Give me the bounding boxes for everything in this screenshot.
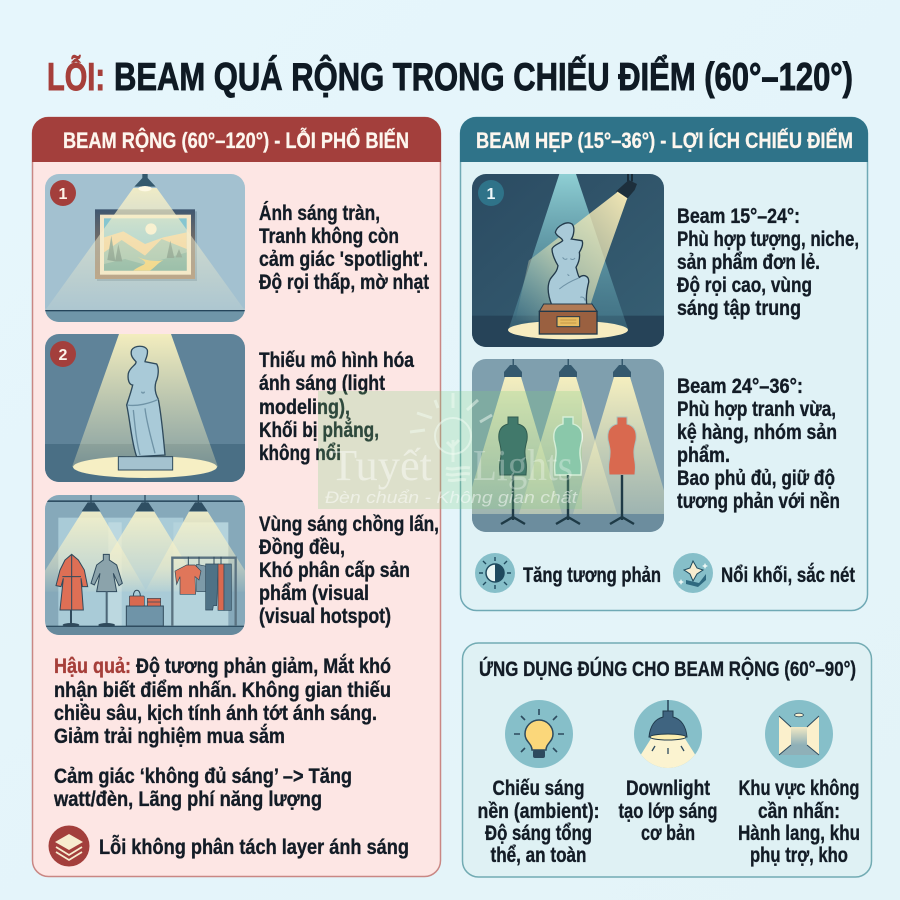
text: ánh sáng tràn bbox=[259, 202, 429, 294]
text: ánh sáng tràn: Tranh không còn bbox=[259, 225, 399, 248]
icon: sparkle block bbox=[673, 553, 713, 593]
text: ánh sáng tràn: Độ rọi thấp, mờ nhạt bbox=[259, 271, 429, 294]
text: beam 24-36: Beam 24°–36°: bbox=[677, 375, 803, 398]
text: khu vực không cần nhấn: cần nhấn: bbox=[758, 800, 840, 823]
text: vùng sáng chồng lấn: Vùng sáng chồng lấn, bbox=[259, 513, 439, 536]
text: khu vực không cần nhấn bbox=[738, 777, 860, 867]
text: nổi khối: Nổi khối, sắc nét bbox=[721, 563, 855, 587]
text: chiếu sáng nền: Chiếu sáng bbox=[492, 777, 584, 800]
badge 1: 1 bbox=[59, 186, 68, 203]
text: vùng sáng chồng lấn: Đồng đều, bbox=[259, 536, 345, 559]
text: downlight bbox=[618, 777, 718, 845]
text: vùng sáng chồng lấn: (visual hotspot) bbox=[259, 605, 391, 628]
text: vùng sáng chồng lấn: Khó phân cấp sản bbox=[259, 559, 410, 582]
panel header bbox=[32, 117, 441, 162]
illustration 2: statue under wide beam bbox=[45, 334, 245, 482]
text: hậu quả: Hậu quả: bbox=[54, 655, 131, 678]
text: beam 15-24: Phù hợp tượng, niche, bbox=[677, 228, 859, 251]
text: beam 24-36 bbox=[677, 375, 840, 513]
watermark bbox=[318, 391, 582, 509]
watermark: Đèn chuẩn - Không gian chất bbox=[325, 488, 578, 507]
panel background bbox=[462, 643, 872, 877]
text: beam 24-36: Bao phủ đủ, giữ độ bbox=[677, 467, 835, 490]
text: cảm giác không đủ sáng: watt/đèn, Lãng phí năng lượng bbox=[53, 788, 322, 811]
icon: layers bbox=[48, 826, 90, 866]
panel header: BEAM RỘNG (60°–120°) - LỖI PHỔ BIẾN bbox=[63, 127, 409, 153]
text: beam 15-24 bbox=[677, 205, 859, 320]
text: chiếu sáng nền: nền (ambient): bbox=[478, 800, 600, 823]
text: hậu quả: Độ tương phản giảm, Mắt khó bbox=[136, 654, 391, 678]
illustration: mannequins under narrow beams bbox=[464, 359, 671, 532]
text: beam 24-36: Phù hợp tranh vừa, bbox=[677, 398, 836, 421]
panel: beam hẹp bbox=[460, 117, 868, 610]
icon: corridor bbox=[765, 700, 833, 768]
panel background bbox=[460, 118, 868, 610]
text: ánh sáng tràn: Ánh sáng tràn, bbox=[259, 202, 380, 225]
text: hậu quả: nhận biết điểm nhấn. Không gian thiếu bbox=[54, 679, 391, 702]
icon: downlight bbox=[634, 700, 702, 768]
text: vùng sáng chồng lấn: phẩm (visual bbox=[259, 582, 369, 605]
illustration 3: store with overlapping beams bbox=[45, 495, 245, 635]
watermark: Lights bbox=[473, 441, 573, 490]
text: khu vực không cần nhấn: Khu vực không bbox=[738, 777, 860, 800]
panel: beam rộng bbox=[32, 117, 441, 876]
text: tăng tương phản: Tăng tương phản bbox=[523, 564, 661, 587]
text: thiếu mô hình hóa: modeling), bbox=[259, 396, 350, 419]
title: LỖI: bbox=[47, 54, 105, 99]
panel: ứng dụng đúng bbox=[462, 643, 872, 877]
text: beam 24-36: phẩm. bbox=[677, 444, 730, 467]
icon: contrast bbox=[475, 553, 515, 593]
badge 2 bbox=[50, 341, 76, 367]
text: hậu quả bbox=[54, 654, 391, 748]
text: beam 15-24: Độ rọi cao, vùng bbox=[677, 274, 812, 297]
text: downlight: tạo lớp sáng bbox=[618, 800, 718, 823]
text: khu vực không cần nhấn: Hành lang, khu bbox=[738, 822, 860, 845]
illustration: statue under narrow beams bbox=[472, 174, 664, 347]
text: vùng sáng chồng lấn bbox=[259, 513, 439, 628]
text: thiếu mô hình hóa: ánh sáng (light bbox=[259, 372, 385, 395]
badge 1: 1 bbox=[487, 186, 496, 203]
text: thiếu mô hình hóa: Khối bị phẳng, bbox=[259, 418, 379, 442]
text: lỗi không phân tách layer: Lỗi không phân tách layer ánh sáng bbox=[99, 835, 409, 859]
text: chiếu sáng nền bbox=[478, 777, 600, 867]
watermark: Tuyết bbox=[330, 441, 432, 490]
text: beam 15-24: Beam 15°–24°: bbox=[677, 205, 800, 228]
badge 1 bbox=[50, 180, 76, 206]
text: khu vực không cần nhấn: phụ trợ, kho bbox=[750, 844, 848, 867]
text: beam 15-24: sản phẩm đơn lẻ. bbox=[677, 251, 820, 274]
panel background bbox=[32, 118, 440, 876]
illustration 1: painting under wide beam bbox=[45, 174, 245, 322]
panel header bbox=[460, 117, 868, 162]
text: thiếu mô hình hóa: Thiếu mô hình hóa bbox=[259, 349, 414, 372]
text: hậu quả: chiều sâu, kịch tính ánh tớt ánh sáng. bbox=[54, 702, 377, 725]
text: cảm giác không đủ sáng bbox=[53, 765, 352, 811]
text: ánh sáng tràn: cảm giác 'spotlight'. bbox=[259, 248, 428, 271]
text: beam 15-24: sáng tập trung bbox=[677, 297, 801, 320]
text: chiếu sáng nền: Độ sáng tổng bbox=[485, 822, 592, 845]
text: cảm giác không đủ sáng: Cảm giác ‘không đủ sáng’ –> Tăng bbox=[54, 765, 352, 788]
badge 2: 2 bbox=[59, 347, 68, 364]
text: downlight: Downlight bbox=[626, 777, 710, 800]
text: thiếu mô hình hóa: không nổi bbox=[259, 442, 341, 465]
text: downlight: cơ bản bbox=[641, 822, 695, 845]
text: beam 24-36: tương phản với nền bbox=[677, 490, 840, 513]
badge 1 bbox=[478, 180, 504, 206]
text: beam 24-36: kệ hàng, nhóm sản bbox=[677, 421, 837, 444]
text: chiếu sáng nền: thể, an toàn bbox=[490, 844, 586, 867]
text: hậu quả: Giảm trải nghiệm mua sắm bbox=[54, 724, 285, 748]
text: thiếu mô hình hóa bbox=[259, 349, 414, 465]
icon: light bulb bbox=[505, 700, 573, 768]
